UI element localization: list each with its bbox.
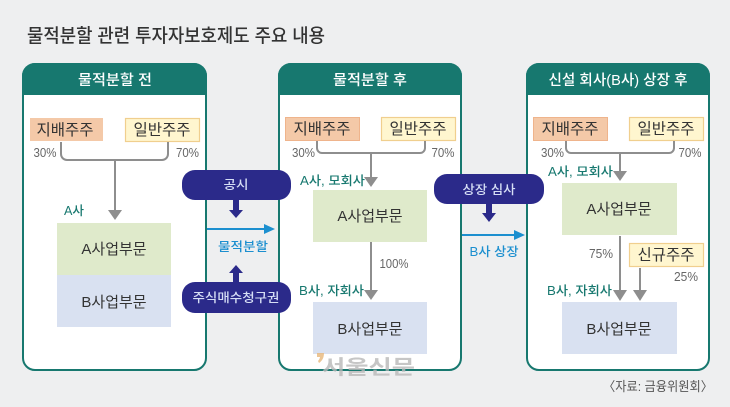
box: general shareholders [382, 118, 456, 140]
block: business A [57, 223, 171, 275]
box: controlling shareholder: 지배주주 [293, 120, 351, 138]
label: parent company: A사, 모회사 [548, 165, 614, 179]
panel: after listing [526, 63, 710, 370]
arrow 25 percent [633, 268, 647, 301]
pill: disclosure: 공시 [224, 178, 248, 192]
percent 70: 70% [678, 145, 702, 160]
box: controlling shareholder [30, 118, 103, 141]
panel: before split [22, 63, 207, 370]
source: 〈자료: 금융위원회〉 [603, 379, 713, 394]
box: new shareholders: 신규주주 [637, 246, 695, 264]
block: business A: A사업부문 [586, 201, 652, 218]
box: general shareholders: 일반주주 [389, 120, 447, 138]
block: business B [562, 302, 677, 354]
box: new shareholders [630, 244, 704, 266]
header: after listing: 신설 회사(B사) 상장 후 [548, 72, 688, 89]
block: business A: A사업부문 [81, 241, 147, 258]
block: business A [562, 183, 677, 235]
panel: after split [278, 63, 462, 370]
box: general shareholders [126, 118, 200, 142]
box: general shareholders [630, 118, 704, 140]
connector: listing process [434, 174, 544, 259]
percent 30: 30% [541, 145, 564, 160]
block: business A: A사업부문 [337, 208, 403, 225]
label: subsidiary: B사, 자회사 [299, 284, 365, 298]
percent 70: 70% [176, 145, 199, 160]
percent 30: 30% [292, 145, 315, 160]
block: business B: B사업부문 [337, 321, 403, 338]
pill: appraisal right: 주식매수청구권 [192, 290, 280, 305]
label: B listing: B사 상장 [470, 245, 519, 259]
box: controlling shareholder: 지배주주 [541, 120, 599, 138]
header: after split [278, 63, 462, 95]
box: general shareholders: 일반주주 [133, 121, 191, 139]
arrow: appraisal right up [229, 265, 243, 282]
percent 100: 100% [380, 256, 409, 271]
header: before split [22, 63, 207, 95]
box: controlling shareholder [534, 118, 608, 140]
pill: listing review: 상장 심사 [462, 183, 516, 197]
block: business B [313, 302, 427, 354]
watermark: 서울신문 [322, 356, 415, 379]
title: 물적분할 관련 투자자보호제도 주요 내용 [27, 25, 325, 47]
arrow: split right [207, 224, 275, 234]
box: general shareholders: 일반주주 [637, 120, 695, 138]
label: parent company: A사, 모회사 [300, 174, 366, 188]
block: business B [57, 275, 171, 327]
percent 75: 75% [589, 246, 613, 261]
percent 25: 25% [674, 269, 698, 284]
percent 30: 30% [34, 145, 57, 160]
label: company A: A사 [64, 204, 84, 218]
connector arrow [566, 141, 674, 181]
arrow 75 percent [613, 236, 627, 301]
header: before split: 물적분할 전 [78, 72, 152, 89]
watermark [317, 353, 415, 379]
arrow: listing right [462, 230, 525, 240]
label: physical division: 물적분할 [218, 239, 269, 254]
pill: appraisal right [182, 282, 291, 313]
block: business B: B사업부문 [81, 294, 147, 311]
percent 70: 70% [432, 145, 455, 160]
arrow: disclosure down [229, 200, 243, 218]
label: subsidiary: B사, 자회사 [547, 284, 613, 298]
pill: disclosure [182, 170, 291, 200]
block: business A [313, 190, 427, 242]
connector arrow [61, 142, 168, 220]
box: controlling shareholder: 지배주주 [36, 121, 94, 139]
block: business B: B사업부문 [586, 321, 652, 338]
arrow 100 percent [364, 242, 378, 300]
header: after listing [526, 63, 710, 95]
connector arrow [317, 141, 425, 187]
connector: split process [182, 170, 291, 313]
header: after split: 물적분할 후 [333, 72, 407, 89]
box: controlling shareholder [286, 118, 360, 140]
arrow: review down [482, 204, 496, 222]
